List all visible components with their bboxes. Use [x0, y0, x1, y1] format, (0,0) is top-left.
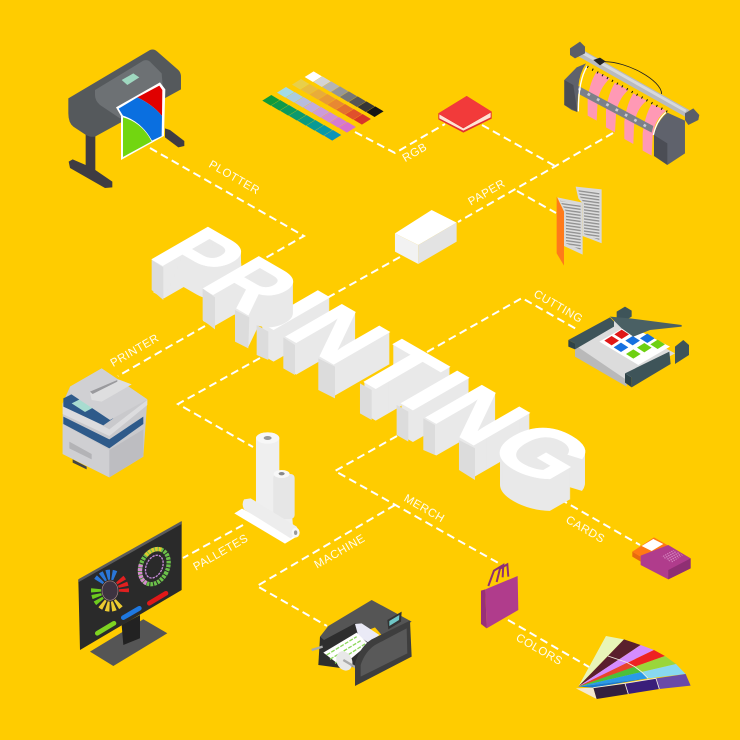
- icon: colour swatches: [262, 71, 384, 141]
- icon: red book: [438, 96, 492, 133]
- icon: paper rolls: [234, 432, 300, 544]
- icon: card cutter: [568, 307, 689, 387]
- icon: paper stack: [395, 210, 457, 264]
- icon: cards box: [632, 537, 691, 579]
- label: colors: COLORS: [514, 632, 564, 668]
- icon: label printing machine: [312, 600, 412, 686]
- label: cards: CARDS: [563, 514, 607, 546]
- label: rgb: RGB: [401, 141, 429, 165]
- label: machine: MACHINE: [313, 533, 367, 571]
- label: plotter: PLOTTER: [207, 159, 261, 197]
- icon: monitor: [78, 521, 182, 666]
- text: INTING: [239, 277, 619, 497]
- label: cutting: CUTTING: [531, 288, 585, 326]
- icon: large format printer: [564, 42, 699, 165]
- label: printer: PRINTER: [109, 332, 161, 370]
- icon: plotter: [68, 49, 184, 188]
- icon: shopping bag: [481, 564, 518, 628]
- connector lines: [118, 124, 640, 667]
- title: PRINTING in isometric 3D letters: [129, 214, 619, 511]
- label: palletes: PALLETES: [191, 532, 251, 574]
- label: merch: MERCH: [402, 493, 446, 525]
- icon: folded leaflet: [557, 187, 602, 266]
- icon: office printer: [63, 368, 147, 477]
- label: paper: PAPER: [466, 178, 508, 208]
- icon: colour fan: [576, 636, 691, 699]
- text: P: [129, 214, 267, 293]
- text: R: [180, 243, 323, 326]
